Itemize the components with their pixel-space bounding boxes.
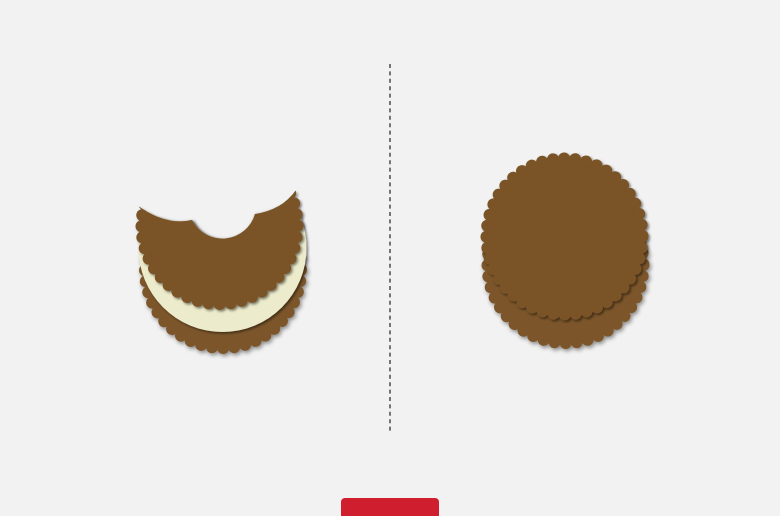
cream filling: [138, 199, 310, 335]
bitten cookie with cream filling: [135, 190, 312, 359]
infographic canvas: [135, 64, 654, 516]
top biscuit with bite taken out: [135, 190, 306, 313]
red button: [341, 498, 439, 516]
dashed divider line: [389, 64, 391, 433]
bottom biscuit: [144, 192, 302, 348]
whole cookie: [486, 158, 644, 344]
top biscuit: [486, 158, 643, 315]
bottom biscuit: [487, 186, 644, 344]
